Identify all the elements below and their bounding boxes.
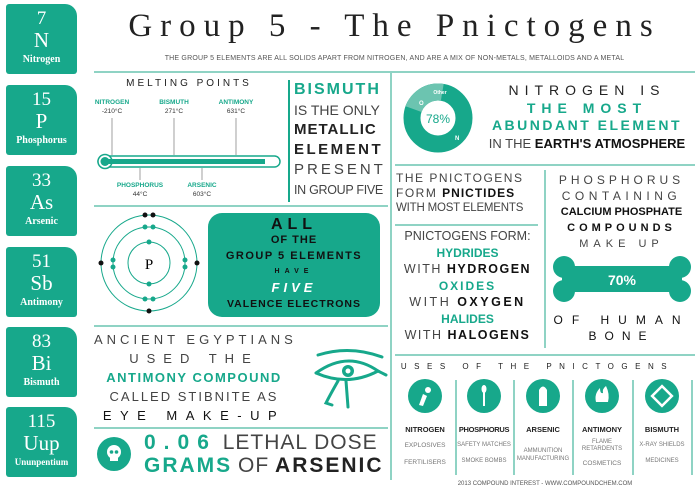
tile: bismuth: Bi xyxy=(32,351,51,375)
text block: phosphorus bone: COMPOUNDS xyxy=(567,222,676,234)
tile: antimony: Antimony xyxy=(20,297,63,308)
callout: five valence electrons xyxy=(208,213,380,317)
text block: bismuth only metallic: PRESENT xyxy=(294,161,386,178)
use: bismuth: BISMUTH xyxy=(645,425,679,434)
thermometer chart: 631°C xyxy=(227,107,245,115)
heading: melting points: MELTING POINTS xyxy=(126,78,252,89)
use: phosphorus: SMOKE BOMBS xyxy=(461,458,506,464)
text block: nitrogen most abundant: THE MOST xyxy=(527,100,647,116)
use: antimony: FLAME xyxy=(592,439,612,445)
tile: phosphorus xyxy=(6,85,77,155)
text block: nitrogen most abundant: ABUNDANT ELEMENT xyxy=(492,117,682,133)
text block: lethal dose arsenic xyxy=(144,431,384,477)
tile: phosphorus: 15 xyxy=(32,89,51,110)
tile: ununpentium: Uup xyxy=(23,431,60,455)
thermometer chart: 271°C xyxy=(165,107,183,115)
use: bismuth: X-RAY SHIELDS xyxy=(639,442,685,448)
text: of human bone xyxy=(554,313,690,343)
panel: melting points xyxy=(95,78,281,198)
tile: bismuth: Bismuth xyxy=(23,377,60,388)
text block: hydrides oxides halides: WITH HALOGENS xyxy=(405,328,530,342)
callout: five valence electrons: ALL xyxy=(271,216,317,233)
use: antimony: COSMETICS xyxy=(583,460,621,467)
tile: arsenic xyxy=(6,166,77,236)
thermometer chart: 44°C xyxy=(133,190,148,198)
text block: hydrides oxides halides: PNICTOGENS FORM: xyxy=(404,229,531,243)
text block: ancient egyptians: ANTIMONY COMPOUND xyxy=(106,370,282,385)
text block: ancient egyptians: EYE MAKE-UP xyxy=(103,408,285,423)
thermometer chart: BISMUTH xyxy=(159,99,189,106)
text block: nitrogen most abundant xyxy=(489,82,685,150)
tile: ununpentium: 115 xyxy=(28,411,55,432)
text: of human bone: BONE xyxy=(588,329,654,343)
thermometer chart: PHOSPHORUS xyxy=(117,182,164,189)
text block: pnictides: THE PNICTOGENS xyxy=(396,171,523,185)
tile: nitrogen: 7 xyxy=(37,8,46,29)
icon: phosphorus atom diagram: P xyxy=(145,257,153,273)
use: arsenic: ARSENIC xyxy=(526,425,560,434)
icon: bone 70% xyxy=(553,256,691,302)
callout: five valence electrons: VALENCE ELECTRONS xyxy=(227,298,361,310)
use: nitrogen: EXPLOSIVES xyxy=(405,442,445,449)
tile: arsenic: As xyxy=(30,190,53,214)
use: nitrogen xyxy=(404,379,446,466)
text block: ancient egyptians: USED THE xyxy=(129,351,259,366)
tile: arsenic: 33 xyxy=(32,170,51,191)
text block: phosphorus bone: CALCIUM PHOSPHATE xyxy=(561,206,682,218)
use: phosphorus: SAFETY MATCHES xyxy=(457,442,511,448)
use: arsenic xyxy=(517,379,569,462)
text block: hydrides oxides halides: WITH OXYGEN xyxy=(409,295,526,309)
tile: ununpentium: Ununpentium xyxy=(15,457,68,467)
text block: phosphorus bone xyxy=(559,173,684,250)
callout: five valence electrons: FIVE xyxy=(272,280,316,295)
tile: antimony: 51 xyxy=(32,251,51,272)
text block: ancient egyptians: CALLED STIBNITE AS xyxy=(110,389,278,404)
text block: phosphorus bone: CONTAINING xyxy=(562,189,681,203)
text block: hydrides oxides halides xyxy=(404,229,531,342)
text: of human bone: OF HUMAN xyxy=(554,313,690,327)
footer: 2013 COMPOUND INTEREST - WWW.COMPOUNDCHEM.COM xyxy=(458,481,632,487)
tile: nitrogen: N xyxy=(34,28,49,52)
thermometer chart: ANTIMONY xyxy=(219,99,254,106)
text block: bismuth only metallic: METALLIC xyxy=(294,121,377,138)
text block: nitrogen most abundant: IN THE EARTH'S ATMOSPHERE xyxy=(489,136,685,150)
chart: nitrogen donut xyxy=(404,84,472,152)
text block: pnictides: WITH MOST ELEMENTS xyxy=(396,202,523,214)
text block: nitrogen most abundant: NITROGEN IS xyxy=(508,82,666,98)
text block: hydrides oxides halides: HYDRIDES xyxy=(436,246,498,260)
icon: skull xyxy=(97,437,131,471)
callout: five valence electrons: OF THE xyxy=(271,234,317,246)
use: antimony: RETARDENTS xyxy=(582,446,622,452)
chart: nitrogen donut: Other xyxy=(433,90,447,96)
use: phosphorus: PHOSPHORUS xyxy=(459,425,509,434)
callout: five valence electrons: GROUP 5 ELEMENTS xyxy=(226,250,362,262)
text block: bismuth only metallic: IS THE ONLY xyxy=(294,102,380,118)
use: arsenic: AMMUNITION xyxy=(524,448,562,454)
thermometer chart: NITROGEN xyxy=(95,99,129,106)
text block: phosphorus bone: MAKE UP xyxy=(579,238,664,250)
text block: bismuth only metallic: BISMUTH xyxy=(294,81,381,98)
text block: bismuth only metallic: ELEMENT xyxy=(294,141,383,158)
panel: uses of the pnictogens xyxy=(401,362,693,475)
tile: antimony xyxy=(6,247,77,317)
use: nitrogen: FERTILISERS xyxy=(404,459,446,466)
tile: nitrogen: Nitrogen xyxy=(23,54,60,65)
text block: lethal dose arsenic: 0.06 LETHAL DOSE xyxy=(144,431,378,454)
thermometer chart: 603°C xyxy=(193,190,211,198)
icon: eye of horus xyxy=(314,349,388,408)
text block: hydrides oxides halides: OXIDES xyxy=(439,278,496,292)
text block: ancient egyptians xyxy=(94,332,297,423)
title: Group 5 - The Pnictogens xyxy=(128,8,661,44)
chart: nitrogen donut: 78% xyxy=(426,112,450,126)
text block: pnictides: FORM PNICTIDES xyxy=(396,186,515,200)
text block: hydrides oxides halides: WITH HYDROGEN xyxy=(404,262,531,276)
text block: pnictides xyxy=(396,171,523,214)
text block: lethal dose arsenic: GRAMS OF ARSENIC xyxy=(144,454,384,477)
callout: five valence electrons: HAVE xyxy=(275,268,313,275)
text block: bismuth only metallic xyxy=(288,80,388,202)
tile: arsenic: Arsenic xyxy=(25,216,58,227)
use: antimony xyxy=(582,379,622,467)
chart: nitrogen donut: O xyxy=(419,101,424,107)
thermometer chart: ARSENIC xyxy=(187,182,217,189)
icon: phosphorus atom diagram xyxy=(98,212,200,314)
use: nitrogen: NITROGEN xyxy=(405,425,445,434)
tile: bismuth: 83 xyxy=(32,331,51,352)
thermometer chart xyxy=(95,99,281,198)
chart: nitrogen donut: N xyxy=(455,136,459,142)
icon: bone 70%: 70% xyxy=(608,272,637,288)
subtitle: THE GROUP 5 ELEMENTS ARE ALL SOLIDS APART FROM NITROGEN, AND ARE A MIX OF NON-METALS, METALLOIDS AND A METAL xyxy=(165,55,624,62)
tile: nitrogen xyxy=(6,4,77,74)
use: arsenic: MANUFACTURING xyxy=(517,456,569,462)
tile: ununpentium xyxy=(6,407,77,477)
heading: uses: USES OF THE PNICTOGENS xyxy=(401,362,674,371)
use: phosphorus xyxy=(457,379,511,464)
thermometer chart: -210°C xyxy=(102,107,122,115)
tile: antimony: Sb xyxy=(30,271,53,295)
text block: phosphorus bone: PHOSPHORUS xyxy=(559,173,684,187)
use: antimony: ANTIMONY xyxy=(582,425,622,434)
text block: ancient egyptians: ANCIENT EGYPTIANS xyxy=(94,332,297,347)
use: bismuth xyxy=(639,379,685,464)
text block: hydrides oxides halides: HALIDES xyxy=(441,312,494,326)
text block: bismuth only metallic: IN GROUP FIVE xyxy=(294,183,383,197)
use: bismuth: MEDICINES xyxy=(645,458,679,464)
tile: phosphorus: Phosphorus xyxy=(16,135,67,146)
tile: bismuth xyxy=(6,327,77,397)
tile: phosphorus: P xyxy=(36,109,47,133)
